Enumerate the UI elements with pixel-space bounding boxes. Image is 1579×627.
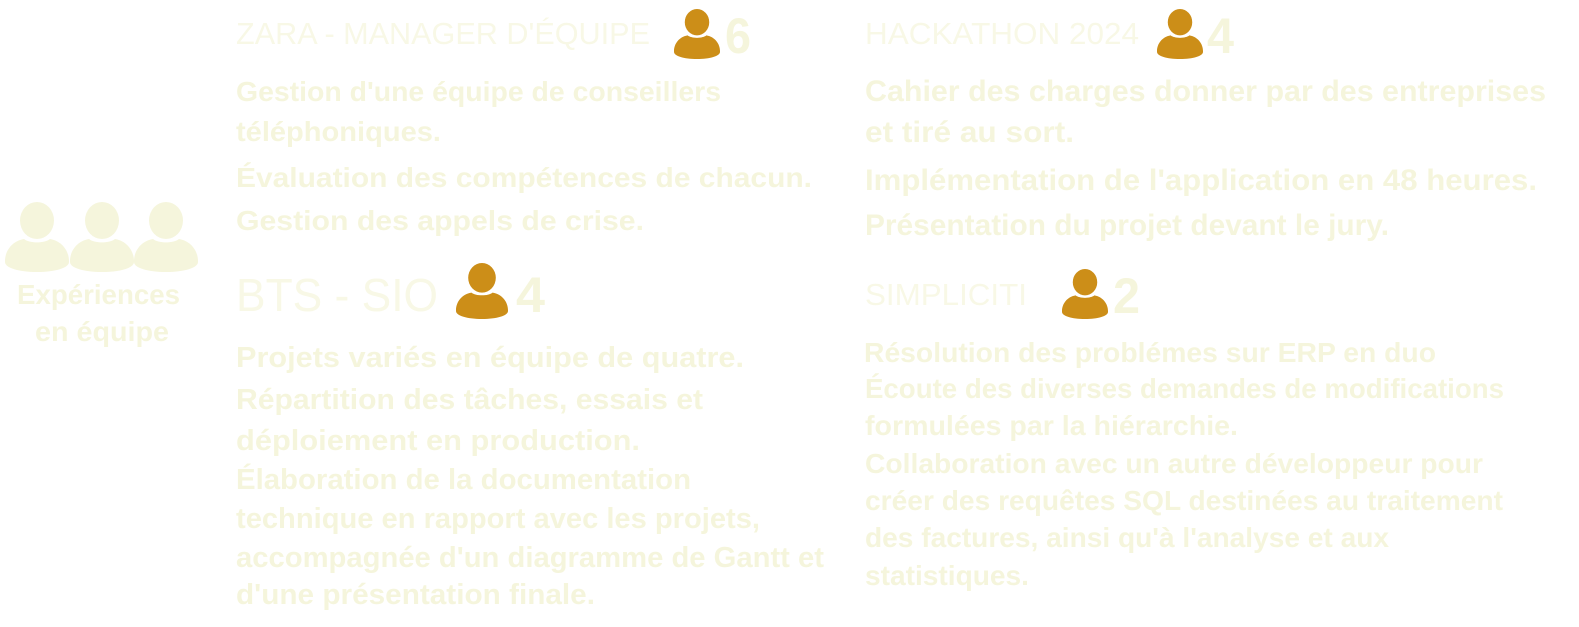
panel: Zara xyxy=(236,8,820,236)
team size: 2: 2 xyxy=(1113,268,1140,324)
description: Simpliciti: statistiques. xyxy=(865,560,1029,591)
description: BTS SIO: Élaboration de la documentation xyxy=(236,462,691,496)
description: Simpliciti: Résolution des problémes sur ERP en duo xyxy=(864,337,1436,368)
description: Simpliciti: Collaboration avec un autre développeur pour xyxy=(865,448,1483,479)
description: BTS SIO: Répartition des tâches, essais et xyxy=(236,384,703,416)
heading: Hackathon: HACKATHON 2024 xyxy=(865,16,1139,51)
heading: Simpliciti: SIMPLICITI xyxy=(865,277,1027,312)
description: BTS SIO: technique en rapport avec les projets, xyxy=(236,503,760,535)
description: Simpliciti: formulées par la hiérarchie. xyxy=(865,410,1238,441)
team size: 4: 4 xyxy=(1207,8,1234,64)
description: Zara: téléphoniques. xyxy=(236,116,441,147)
description: Simpliciti: des factures, ainsi qu'à l'analyse et aux xyxy=(865,522,1389,553)
description: Simpliciti: Écoute des diverses demandes de modifications xyxy=(865,373,1504,404)
panel: Simpliciti xyxy=(864,268,1512,591)
panel: Hackathon 2024 xyxy=(865,8,1554,242)
description: BTS SIO: déploiement en production. xyxy=(236,425,640,457)
icon: person xyxy=(1157,9,1203,59)
icon: three people xyxy=(5,202,198,272)
icon: person xyxy=(456,263,508,319)
label: expériences en équipe: Expériences xyxy=(17,279,180,310)
description: BTS SIO: accompagnée d'un diagramme de Gantt et xyxy=(236,542,824,574)
description: Hackathon: Présentation du projet devant le jury. xyxy=(865,209,1389,242)
description: Zara: Gestion d'une équipe de conseillers xyxy=(236,76,721,107)
description: BTS SIO: d'une présentation finale. xyxy=(236,579,595,611)
label: expériences en équipe: en équipe xyxy=(35,316,169,347)
heading: BTS SIO: BTS - SIO xyxy=(236,269,438,321)
description: Zara: Gestion des appels de crise. xyxy=(236,205,644,236)
description: BTS SIO: Projets variés en équipe de quatre. xyxy=(236,342,744,374)
description: Zara: Évaluation des compétences de chacun. xyxy=(236,162,812,193)
team size: 4: 4 xyxy=(516,267,545,323)
icon: person xyxy=(1062,269,1108,319)
description: Simpliciti: créer des requêtes SQL destinées au traitement xyxy=(865,485,1503,516)
panel: BTS SIO xyxy=(236,263,832,611)
team size: 6: 6 xyxy=(725,8,751,64)
heading: Zara: ZARA - MANAGER D'ÉQUIPE xyxy=(236,16,650,51)
icon: person xyxy=(674,9,720,59)
panel: expériences en équipe xyxy=(5,202,198,347)
description: Hackathon: et tiré au sort. xyxy=(865,116,1074,149)
description: Hackathon: Implémentation de l'application en 48 heures. xyxy=(865,164,1537,197)
description: Hackathon: Cahier des charges donner par des entreprises xyxy=(865,75,1546,108)
